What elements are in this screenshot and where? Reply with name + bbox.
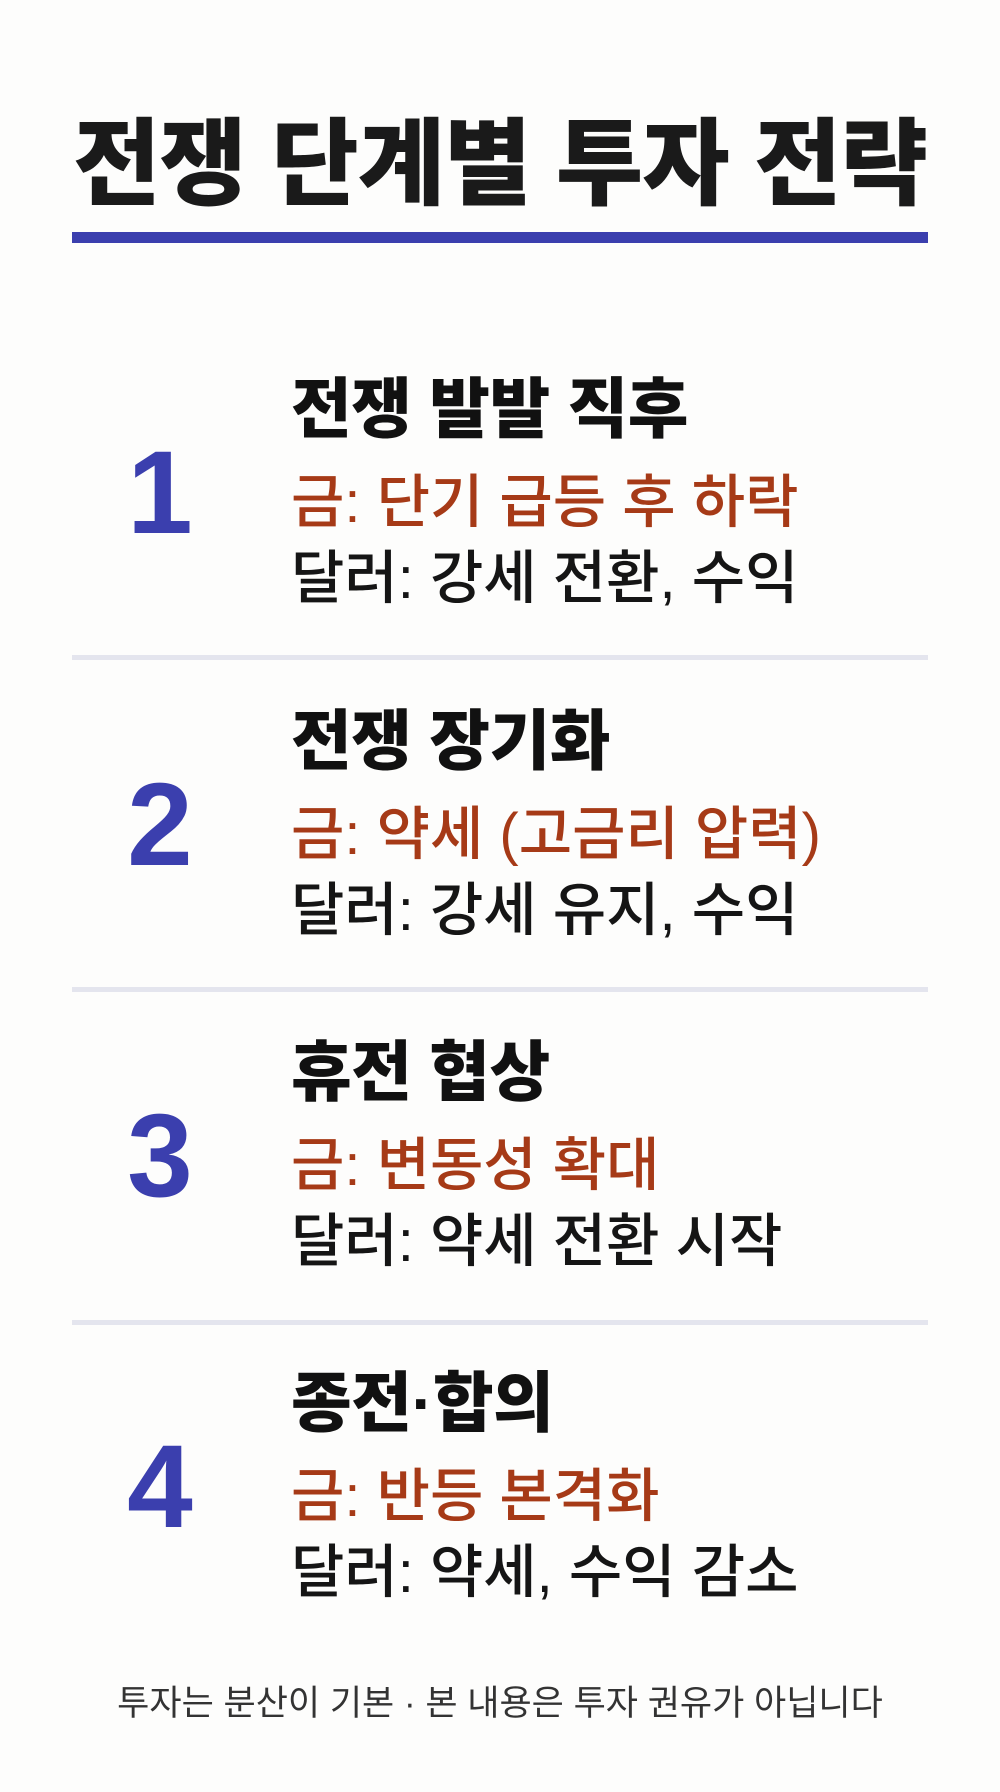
number 3: 3 — [127, 1090, 193, 1222]
heading 1: 전쟁 발발 직후 — [291, 372, 688, 446]
panel: stage 2 — [127, 704, 821, 943]
dollar line 1: 달러: 강세 전환, 수익 — [291, 546, 798, 611]
number 2: 2 — [127, 759, 193, 891]
dollar line 4: 달러: 약세, 수익 감소 — [291, 1540, 798, 1605]
panel: stage 1 — [127, 372, 798, 611]
dollar line 2: 달러: 강세 유지, 수익 — [291, 878, 798, 943]
gold line 3: 금: 변동성 확대 — [291, 1133, 660, 1198]
panel: stage 3 — [127, 1035, 782, 1274]
number 4: 4 — [127, 1421, 193, 1553]
footer disclaimer: 투자는 분산이 기본 · 본 내용은 투자 권유가 아닙니다 — [117, 1684, 883, 1723]
heading 3: 휴전 협상 — [291, 1035, 550, 1109]
gold line 2: 금: 약세 (고금리 압력) — [291, 802, 821, 867]
heading 2: 전쟁 장기화 — [291, 704, 610, 778]
dollar line 3: 달러: 약세 전환 시작 — [291, 1209, 782, 1274]
gold line 4: 금: 반등 본격화 — [291, 1464, 660, 1529]
heading 4: 종전·합의 — [291, 1366, 553, 1440]
title underline — [72, 232, 928, 243]
gold line 1: 금: 단기 급등 후 하락 — [291, 470, 798, 535]
title: 전쟁 단계별 투자 전략 — [73, 112, 927, 218]
number 1: 1 — [127, 427, 193, 559]
panel: stage 4 — [127, 1366, 798, 1605]
